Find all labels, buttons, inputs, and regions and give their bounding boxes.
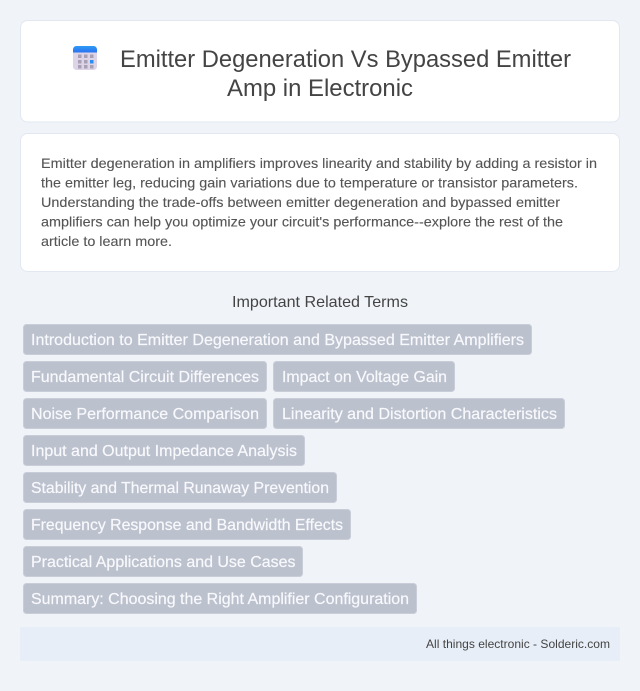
tag: Practical Applications and Use Cases [31, 554, 296, 571]
title: Emitter Degeneration Vs Bypassed Emitter [120, 46, 571, 73]
tag list [24, 324, 564, 614]
tag [24, 472, 336, 502]
tag: Input and Output Impedance Analysis [31, 443, 297, 460]
panel: header [20, 20, 620, 122]
tag: Noise Performance Comparison [31, 406, 259, 423]
tag [24, 510, 350, 540]
text block: description [41, 155, 597, 249]
tag: Fundamental Circuit Differences [31, 369, 259, 386]
tag [274, 362, 454, 392]
text block: description: article to learn more. [41, 233, 172, 249]
panel: description [20, 134, 620, 272]
title: Amp in Electronic [227, 75, 413, 102]
text block: description: the emitter leg, reducing gain variations due to temperature or transistor parameters. [41, 174, 578, 190]
icon: calendar grid [73, 46, 97, 70]
heading: related terms: Important Related Terms [232, 294, 408, 311]
tag [24, 324, 532, 354]
text block: description: Emitter degeneration in amplifiers improves linearity and stability by adding a resistor in [41, 155, 597, 171]
tag: Summary: Choosing the Right Amplifier Configuration [31, 591, 409, 608]
tag [24, 436, 304, 466]
tag: Linearity and Distortion Characteristics [282, 406, 557, 423]
title [120, 46, 571, 102]
tag: Stability and Thermal Runaway Prevention [31, 480, 329, 497]
tag [274, 398, 564, 428]
tag [24, 398, 266, 428]
tag [24, 546, 302, 576]
text block: description: amplifiers can help you optimize your circuit's performance--explore the rest of the [41, 214, 563, 230]
text block: description: Understanding the trade-offs between emitter degeneration and bypassed emitter [41, 194, 560, 210]
footer: All things electronic - Solderic.com [426, 637, 610, 651]
tag [24, 584, 416, 614]
tag: Impact on Voltage Gain [282, 369, 447, 386]
footer [20, 627, 620, 661]
tag: Introduction to Emitter Degeneration and Bypassed Emitter Amplifiers [31, 332, 524, 349]
tag: Frequency Response and Bandwidth Effects [31, 517, 343, 534]
tag [24, 362, 266, 392]
